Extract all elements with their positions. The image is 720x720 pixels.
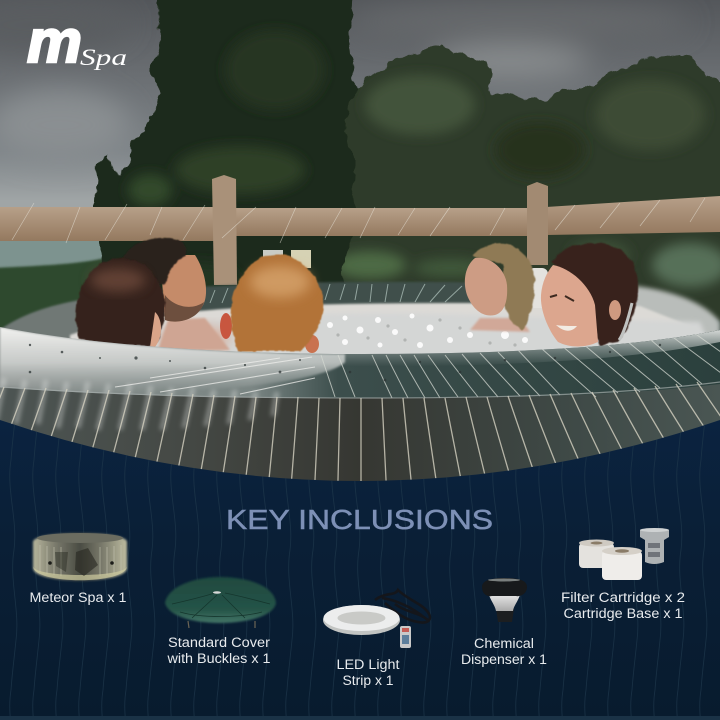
- lower body: [0, 384, 720, 481]
- white headrest: [528, 268, 548, 308]
- navy bottom panel: [0, 420, 720, 720]
- label: [166, 635, 271, 666]
- lower stripes: [0, 382, 720, 481]
- item: Filter Cartridges: [561, 528, 685, 621]
- string lights: [12, 198, 705, 243]
- icon: dispenser: [482, 578, 527, 622]
- boy hair light: [250, 266, 310, 298]
- item: Meteor Spa: [30, 533, 127, 605]
- boy hair: [231, 254, 323, 351]
- left rim white highlight: [0, 327, 345, 392]
- cloud patches: [0, 0, 690, 160]
- person: boy: [220, 254, 323, 353]
- heading: key inclusions: KEY INCLUSIONS: [226, 504, 493, 535]
- girl mouth: [556, 325, 577, 331]
- icon: remote: [400, 626, 411, 648]
- icon: green cover: [165, 577, 276, 628]
- woman cheek: [150, 312, 161, 347]
- far rim of tub: [0, 282, 720, 360]
- distant hills: [0, 241, 130, 271]
- upper rim: [0, 320, 720, 398]
- right bushes: [340, 45, 720, 330]
- icon: cartridge base: [640, 528, 669, 564]
- label: Standard Cover: [168, 635, 271, 650]
- bubble texture: [327, 314, 528, 348]
- label: [561, 590, 685, 621]
- skin under water: [159, 325, 231, 351]
- blonde face: [465, 258, 507, 316]
- person: blonde woman: [465, 244, 534, 332]
- logo: mSpa: Spa: [80, 45, 127, 70]
- item: Standard Cover: [165, 577, 276, 666]
- item: LED Light Strip: [323, 590, 430, 688]
- near treeline: [0, 258, 140, 360]
- curved navy background: [0, 420, 720, 720]
- girl face: [541, 265, 598, 346]
- label: with Buckles x 1: [166, 651, 270, 666]
- label: [461, 636, 547, 667]
- logo: mSpa: m: [27, 8, 82, 75]
- man beard: [165, 295, 204, 322]
- inner wall: [70, 303, 700, 345]
- icon: filter cartridge right: [602, 547, 642, 580]
- label: LED Light: [336, 657, 400, 672]
- blonde shoulders: [470, 318, 530, 332]
- hair sheen: [90, 268, 146, 292]
- right rail: [546, 196, 720, 235]
- right rim soft highlight: [316, 330, 720, 364]
- label: Filter Cartridge x 2: [561, 590, 685, 605]
- blonde hair: [472, 244, 534, 330]
- big conifer tree: [95, 0, 356, 320]
- bottom edge strip: [0, 716, 720, 720]
- left rail: [0, 207, 216, 241]
- wet hair strand: [619, 303, 632, 340]
- label: Chemical: [474, 636, 534, 651]
- man shoulders: [158, 318, 230, 350]
- boy ears: [220, 313, 232, 339]
- middle rail: [234, 208, 530, 236]
- girl hair: [552, 243, 638, 345]
- girl ear: [609, 300, 621, 320]
- rim fan stripes: [321, 330, 720, 398]
- left post: [212, 175, 237, 285]
- icon: filter cartridge left: [579, 540, 614, 568]
- seam: [0, 382, 720, 398]
- label: [336, 657, 400, 688]
- man hair: [122, 238, 187, 285]
- tree highlights: [128, 30, 325, 298]
- label: Cartridge Base x 1: [564, 606, 682, 621]
- label: Meteor Spa x 1: [30, 590, 126, 605]
- sky: [0, 0, 720, 300]
- item: Chemical Dispenser: [461, 578, 547, 667]
- far rim left grey: [0, 300, 80, 345]
- bush highlights: [334, 75, 720, 287]
- person: man: [122, 238, 230, 350]
- water bubbles: [0, 313, 720, 370]
- water droplets: [29, 344, 661, 381]
- man face: [160, 255, 206, 322]
- person: back of dark-haired woman: [76, 258, 165, 346]
- icon: spa tub: [33, 533, 127, 581]
- right post: [527, 182, 548, 265]
- girl eyes: [550, 295, 574, 301]
- fence: [0, 175, 720, 285]
- label: Dispenser x 1: [461, 652, 547, 667]
- logo: mSpa: [27, 8, 127, 75]
- far rim right light: [620, 286, 720, 345]
- wet streak highlights below seam: [0, 378, 277, 430]
- glasses on table: [263, 250, 311, 268]
- front of tub: [0, 327, 720, 481]
- icon: cable: [375, 590, 430, 623]
- label: Strip x 1: [342, 673, 394, 688]
- rim chevron stripes: [115, 357, 315, 394]
- person: smiling girl: [541, 243, 638, 346]
- photo: hot tub scene: [0, 0, 720, 500]
- wavy contour pattern: [0, 420, 720, 716]
- far rim stripes: [210, 284, 462, 303]
- icon: LED reel: [323, 605, 400, 635]
